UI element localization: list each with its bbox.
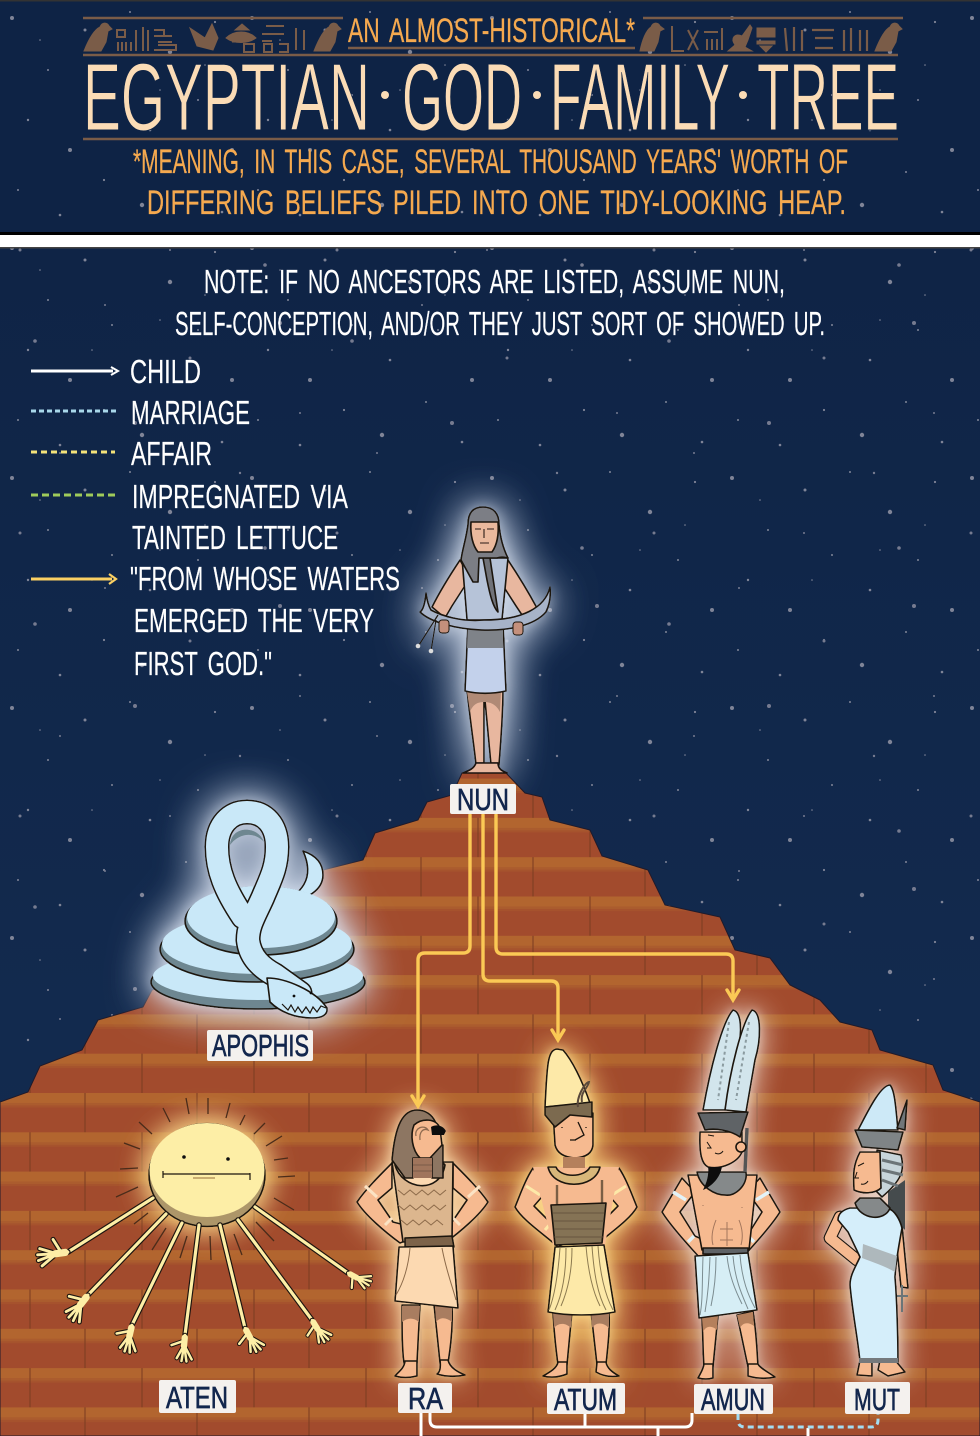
subtitle: an almost-historical: AN ALMOST-HISTORICAL* bbox=[348, 12, 635, 50]
label: Atum: ATUM bbox=[554, 1382, 617, 1417]
label: Mut: MUT bbox=[854, 1382, 900, 1417]
snake coils bbox=[151, 886, 365, 1009]
legend: child bbox=[31, 353, 201, 390]
sun hands bbox=[36, 1238, 373, 1362]
sun arms bbox=[68, 1198, 348, 1335]
label: Nun: NUN bbox=[457, 782, 509, 817]
legend bbox=[31, 353, 400, 682]
figure: Mut bbox=[830, 1085, 908, 1376]
label: Ra: RA bbox=[408, 1381, 443, 1416]
figure: Amun bbox=[662, 1010, 780, 1379]
figure: Nun bbox=[416, 507, 550, 773]
arrow: Nun to Atum bbox=[483, 815, 564, 1040]
title: GOD bbox=[402, 44, 522, 151]
marriage line: Amun and Mut bbox=[738, 1414, 878, 1427]
pyramid bbox=[0, 773, 980, 1436]
legend: marriage: MARRIAGE bbox=[131, 394, 250, 431]
legend: from whose waters: FIRST GOD." bbox=[134, 645, 272, 682]
legend: from whose waters: EMERGED THE VERY bbox=[134, 602, 374, 639]
snake body loop bbox=[217, 812, 300, 993]
label: Amun: AMUN bbox=[701, 1382, 765, 1417]
panel: header bbox=[0, 0, 980, 235]
hieroglyph strip: right bbox=[640, 23, 902, 52]
figure: Atum bbox=[515, 1049, 637, 1377]
title: FAMILY bbox=[550, 44, 730, 151]
legend: impregnated via tainted lettuce: IMPREGNATED VIA bbox=[132, 478, 348, 515]
legend: affair: AFFAIR bbox=[131, 435, 212, 472]
legend: impregnated via tainted lettuce bbox=[31, 478, 348, 556]
subheading text bbox=[133, 143, 848, 222]
figure: Aten bbox=[36, 1098, 373, 1362]
sun disc bbox=[149, 1123, 265, 1226]
title: EGYPTIAN bbox=[83, 44, 370, 151]
hieroglyph strip: left bbox=[84, 23, 341, 52]
sun rays bbox=[116, 1098, 295, 1260]
legend: child: CHILD bbox=[130, 353, 201, 390]
figure: Ra bbox=[357, 1110, 488, 1378]
snake head bbox=[267, 978, 327, 1018]
note text bbox=[175, 263, 825, 342]
label: Apophis: APOPHIS bbox=[212, 1028, 309, 1063]
arrow: Nun to Ra bbox=[412, 815, 470, 1106]
legend: from whose waters: "FROM WHOSE WATERS bbox=[130, 560, 400, 597]
figure: Nun feet on pyramid bbox=[463, 763, 507, 773]
child connector lines bbox=[421, 1412, 808, 1436]
title bbox=[83, 44, 899, 151]
label: Aten: ATEN bbox=[166, 1380, 228, 1415]
legend: from whose waters bbox=[31, 560, 400, 682]
legend: impregnated via tainted lettuce: TAINTED LETTUCE bbox=[132, 519, 338, 556]
arrows: from whose waters bbox=[412, 815, 739, 1106]
figure: Apophis bbox=[151, 812, 365, 1018]
arrow: Nun to Amun bbox=[496, 815, 739, 1000]
